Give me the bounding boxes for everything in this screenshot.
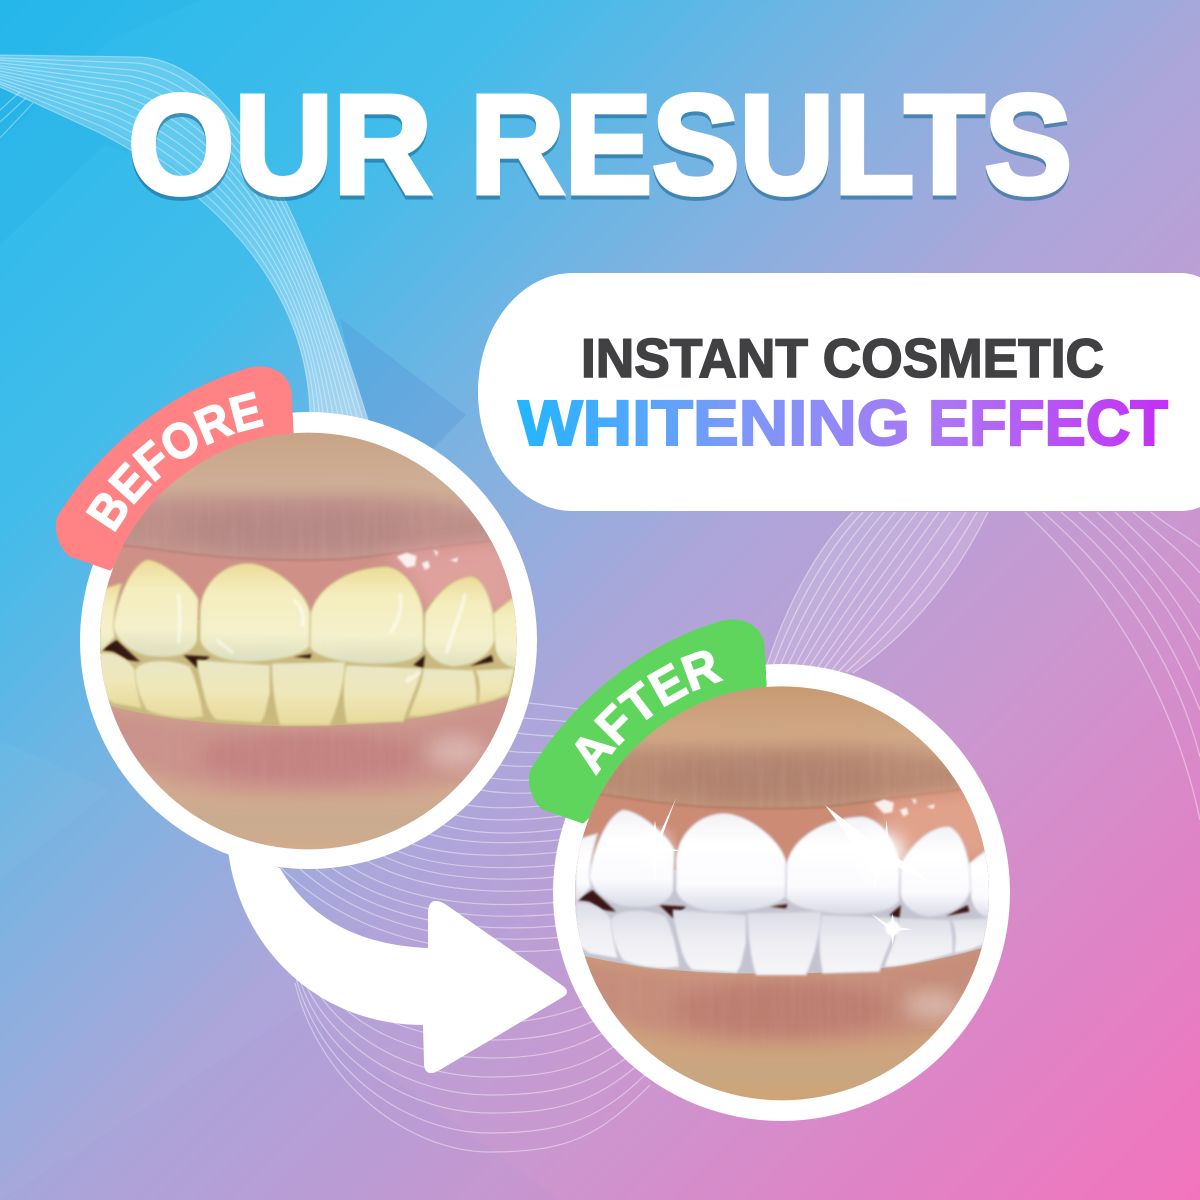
decorative concentric arcs bottom centre: [280, 703, 650, 1152]
sparkle 1: [654, 799, 678, 857]
title: OUR: [128, 65, 432, 223]
background facets: [0, 0, 560, 1200]
before teeth photo: [93, 427, 527, 860]
subtitle line 2 gradient: WHITENING: [518, 387, 910, 459]
after tag: [529, 619, 767, 824]
subtitle line 2 gradient: EFFECT: [928, 387, 1168, 459]
decorative concentric arcs right: [1025, 512, 1200, 820]
subtitle pill panel: [478, 273, 1200, 511]
sparkle 3: [872, 913, 912, 945]
after teeth photo: [567, 677, 1000, 1110]
subtitle line 1: INSTANT COSMETIC: [581, 328, 1104, 389]
decorative wave ribbon middle right: [767, 512, 988, 673]
title: [128, 65, 1072, 223]
decorative wave ribbon top left: [0, 55, 368, 420]
before label: BEFORE: [86, 392, 264, 532]
subtitle line 2 gradient: [518, 387, 1168, 459]
sparkle 2: [825, 805, 914, 876]
after white ring: [553, 664, 1010, 1121]
before tag: [56, 366, 294, 571]
after label: AFTER: [574, 650, 724, 776]
before photo panel: [56, 366, 537, 869]
before white ring: [80, 412, 537, 869]
curved arrow from before to after: [228, 850, 567, 1073]
title: RESULTS: [470, 65, 1072, 223]
after photo panel: [528, 620, 1010, 1121]
